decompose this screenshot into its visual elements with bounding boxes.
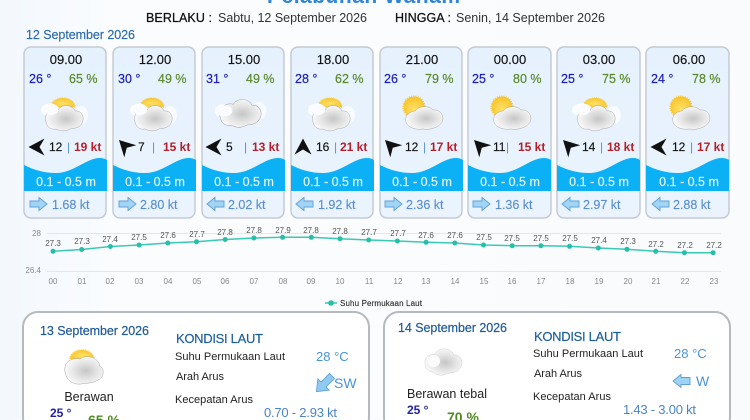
panel: forecast 09.00: 65 % — [69, 72, 98, 86]
panel: 13 September forecast — [23, 312, 369, 420]
panel: 13 September forecast: 0.70 - 2.93 kt — [264, 405, 337, 420]
line chart: sea surface temperature: 27.4 — [102, 235, 118, 244]
line chart: sea surface temperature: 19 — [595, 277, 604, 286]
panel: 14 September forecast: KONDISI LAUT — [534, 329, 621, 344]
panel: forecast 00.00: 25 ° — [472, 72, 494, 86]
line chart: sea surface temperature: 00 — [49, 277, 58, 286]
panel: 13 September forecast: Suhu Permukaan Laut — [175, 351, 285, 363]
panel: forecast 12.00: 49 % — [158, 72, 186, 86]
validity header: Senin, 14 September 2026 — [456, 11, 605, 25]
panel: forecast 03.00: | — [600, 140, 603, 154]
panel: forecast 09.00: 09.00 — [50, 52, 82, 67]
panel: forecast 21.00 — [379, 47, 463, 218]
panel: forecast 00.00: 80 % — [513, 72, 542, 86]
panel: forecast 18.00: 21 kt — [340, 140, 367, 154]
panel: forecast 00.00 — [468, 47, 551, 218]
panel: forecast 15.00: 31 ° — [206, 72, 228, 86]
panel: forecast 15.00: 0.1 - 0.5 m — [214, 175, 274, 189]
panel: forecast 15.00: 15.00 — [228, 52, 260, 67]
panel: forecast 21.00: 21.00 — [406, 52, 438, 67]
panel: 13 September forecast: Arah Arus — [176, 371, 224, 383]
panel: 14 September forecast: W — [696, 373, 710, 389]
panel: 14 September forecast — [384, 312, 730, 420]
panel: forecast 15.00: | — [244, 140, 247, 154]
line chart: sea surface temperature: 27.4 — [591, 236, 607, 245]
line chart: sea surface temperature: 27.7 — [189, 230, 205, 239]
line chart: sea surface temperature: 15 — [480, 277, 489, 286]
panel: forecast 00.00: 1.36 kt — [495, 198, 533, 212]
panel: 14 September forecast: 28 °C — [674, 346, 707, 361]
panel: 13 September forecast: Kecepatan Arus — [175, 394, 254, 406]
panel: forecast 09.00: 26 ° — [29, 72, 51, 86]
panel: forecast 18.00: 62 % — [335, 72, 364, 86]
line chart: sea surface temperature: 05 — [193, 277, 202, 286]
panel: forecast 06.00: 78 % — [692, 72, 720, 86]
line chart: sea surface temperature: 27.5 — [562, 234, 578, 243]
panel: forecast 03.00: 14 — [582, 140, 596, 154]
panel: forecast 00.00: 0.1 - 0.5 m — [480, 175, 540, 189]
line chart: sea surface temperature: 27.5 — [131, 233, 147, 242]
line chart: sea surface temperature: 13 — [422, 277, 431, 286]
panel: forecast 12.00: 30 ° — [118, 72, 140, 86]
panel: 13 September forecast: 28 °C — [316, 349, 349, 364]
panel: forecast 03.00: 25 ° — [561, 72, 583, 86]
line chart: sea surface temperature: 27.7 — [390, 229, 406, 238]
icon: heavy cloud — [425, 349, 462, 375]
line chart: sea surface temperature: 04 — [164, 277, 173, 286]
line chart: sea surface temperature: 28 — [32, 229, 42, 238]
icon: current direction SW — [311, 370, 338, 397]
panel: forecast 06.00: 24 ° — [651, 72, 673, 86]
validity header: HINGGA : — [395, 11, 451, 25]
panel: forecast 15.00: 5 — [226, 140, 233, 154]
line chart: sea surface temperature: 07 — [250, 277, 259, 286]
line chart: sea surface temperature: 03 — [135, 277, 144, 286]
panel: forecast 06.00: 2.88 kt — [673, 198, 711, 212]
panel: forecast 03.00: 2.97 kt — [583, 198, 621, 212]
line chart: sea surface temperature: 27.9 — [275, 226, 291, 235]
panel: forecast 15.00: 13 kt — [252, 140, 279, 154]
panel: 14 September forecast: 1.43 - 3.00 kt — [623, 402, 696, 417]
panel: forecast 12.00: 0.1 - 0.5 m — [125, 175, 185, 189]
line chart: sea surface temperature: 26.4 — [25, 266, 42, 275]
line chart: sea surface temperature: 27.2 — [677, 241, 693, 250]
panel: forecast 09.00: 12 — [49, 140, 63, 154]
line chart: sea surface temperature: 27.3 — [620, 237, 636, 246]
panel: forecast 00.00: 00.00 — [494, 52, 526, 67]
panel: 13 September forecast: SW — [334, 375, 357, 391]
chart legend: Suhu Permukaan Laut — [340, 299, 423, 308]
panel: 14 September forecast: Berawan tebal — [407, 387, 487, 401]
line chart: sea surface temperature: 27.8 — [246, 226, 262, 235]
line chart: sea surface temperature: 27.5 — [533, 234, 549, 243]
panel: 13 September forecast: Berawan — [64, 390, 114, 404]
panel: forecast 06.00: 06.00 — [673, 52, 705, 67]
line chart: sea surface temperature: 23 — [710, 277, 719, 286]
panel: 14 September forecast: Kecepatan Arus — [533, 391, 612, 403]
line chart: sea surface temperature: 11 — [365, 277, 374, 286]
panel: 14 September forecast: 14 September 2026 — [398, 321, 507, 335]
panel: forecast 21.00: | — [423, 140, 426, 154]
line chart: sea surface temperature: 20 — [624, 277, 633, 286]
line chart: sea surface temperature: 27.5 — [504, 234, 520, 243]
panel: forecast 15.00: 49 % — [246, 72, 274, 86]
panel: 13 September forecast: KONDISI LAUT — [176, 331, 263, 346]
panel: forecast 09.00: 0.1 - 0.5 m — [36, 175, 96, 189]
panel: forecast 06.00 — [646, 47, 729, 218]
line chart: sea surface temperature: 01 — [78, 277, 87, 286]
date heading: 12 September 2026 — [26, 28, 135, 42]
panel: forecast 03.00: 03.00 — [583, 52, 615, 67]
panel: forecast 12.00: | — [152, 140, 155, 154]
panel: forecast 21.00: 0.1 - 0.5 m — [392, 175, 452, 189]
panel: forecast 21.00: 2.36 kt — [406, 198, 444, 212]
line chart: sea surface temperature — [25, 226, 722, 286]
panel: forecast 06.00: 0.1 - 0.5 m — [659, 175, 719, 189]
panel: forecast 12.00: 2.80 kt — [140, 198, 178, 212]
panel: forecast 09.00: 1.68 kt — [52, 198, 90, 212]
panel: forecast 15.00 — [202, 47, 285, 218]
line chart: sea surface temperature: 27.8 — [303, 226, 319, 235]
line chart: sea surface temperature: 09 — [307, 277, 316, 286]
line chart: sea surface temperature: 16 — [508, 277, 517, 286]
panel: 14 September forecast: 25 ° — [407, 403, 429, 417]
panel: forecast 18.00: | — [334, 140, 337, 154]
panel: forecast 12.00: 15 kt — [163, 140, 190, 154]
panel: forecast 06.00: | — [690, 140, 693, 154]
panel: forecast 21.00: 12 — [405, 140, 419, 154]
line chart: sea surface temperature: 18 — [566, 277, 575, 286]
panel: forecast 09.00: 19 kt — [74, 140, 101, 154]
line chart: sea surface temperature: 21 — [652, 277, 661, 286]
panel: forecast 12.00: 7 — [138, 140, 145, 154]
line chart: sea surface temperature: 27.6 — [160, 231, 176, 240]
line chart: sea surface temperature: 10 — [336, 277, 345, 286]
panel: forecast 06.00: 12 — [672, 140, 686, 154]
panel: 13 September forecast: 25 ° — [50, 406, 72, 420]
panel: forecast 12.00: 12.00 — [139, 52, 171, 67]
panel: forecast 18.00: 16 — [316, 140, 330, 154]
panel: forecast 21.00: 26 ° — [384, 72, 406, 86]
validity header — [146, 11, 605, 25]
line chart: sea surface temperature: 06 — [221, 277, 230, 286]
line chart: sea surface temperature: 02 — [106, 277, 115, 286]
line chart: sea surface temperature: 08 — [279, 277, 288, 286]
panel: forecast 21.00: 79 % — [425, 72, 454, 86]
line chart: sea surface temperature: 17 — [537, 277, 546, 286]
panel: forecast 15.00: 2.02 kt — [228, 198, 266, 212]
validity header: BERLAKU : — [146, 11, 212, 25]
panel: forecast 03.00: 0.1 - 0.5 m — [569, 175, 629, 189]
line chart: sea surface temperature: 27.2 — [648, 240, 664, 249]
panel: 14 September forecast: Suhu Permukaan Laut — [533, 348, 643, 360]
panel: forecast 18.00: 28 ° — [295, 72, 317, 86]
panel: forecast 03.00 — [557, 47, 640, 218]
panel: forecast 00.00: 11 — [493, 140, 506, 154]
panel: forecast 03.00: 18 kt — [607, 140, 634, 154]
panel: forecast 09.00 — [24, 47, 107, 218]
line chart: sea surface temperature: 27.6 — [418, 231, 434, 240]
line chart: sea surface temperature: 27.6 — [447, 231, 463, 240]
panel: forecast 18.00: 0.1 - 0.5 m — [303, 175, 363, 189]
panel: forecast 09.00: | — [67, 140, 70, 154]
panel: forecast 03.00: 75 % — [602, 72, 630, 86]
line chart: sea surface temperature: 27.3 — [45, 239, 61, 248]
line chart: sea surface temperature: 14 — [451, 277, 460, 286]
line chart: sea surface temperature: 12 — [394, 277, 403, 286]
line chart: sea surface temperature: 27.8 — [217, 228, 233, 237]
panel: forecast 06.00: 17 kt — [697, 140, 724, 154]
icon: cloudy with sun — [65, 350, 103, 384]
panel: forecast 21.00: 17 kt — [430, 140, 457, 154]
panel: forecast 00.00: | — [506, 140, 509, 154]
line chart: sea surface temperature: 27.8 — [332, 227, 348, 236]
line chart: sea surface temperature: 27.3 — [74, 237, 90, 246]
panel: forecast 18.00 — [291, 47, 374, 218]
panel: forecast 00.00: 15 kt — [518, 140, 545, 154]
line chart: sea surface temperature: 27.5 — [476, 233, 492, 242]
line chart: sea surface temperature: 27.2 — [706, 241, 722, 250]
panel: forecast 12.00 — [113, 47, 196, 218]
icon: current direction W — [673, 374, 690, 388]
panel: 14 September forecast: Arah Arus — [534, 368, 582, 380]
line chart: sea surface temperature: 22 — [681, 277, 690, 286]
line chart: sea surface temperature: 27.7 — [361, 228, 377, 237]
panel: forecast 18.00: 18.00 — [317, 52, 349, 67]
validity header: Sabtu, 12 September 2026 — [218, 11, 367, 25]
panel: forecast 18.00: 1.92 kt — [318, 198, 356, 212]
panel: 13 September forecast: 13 September 2026 — [40, 324, 149, 338]
